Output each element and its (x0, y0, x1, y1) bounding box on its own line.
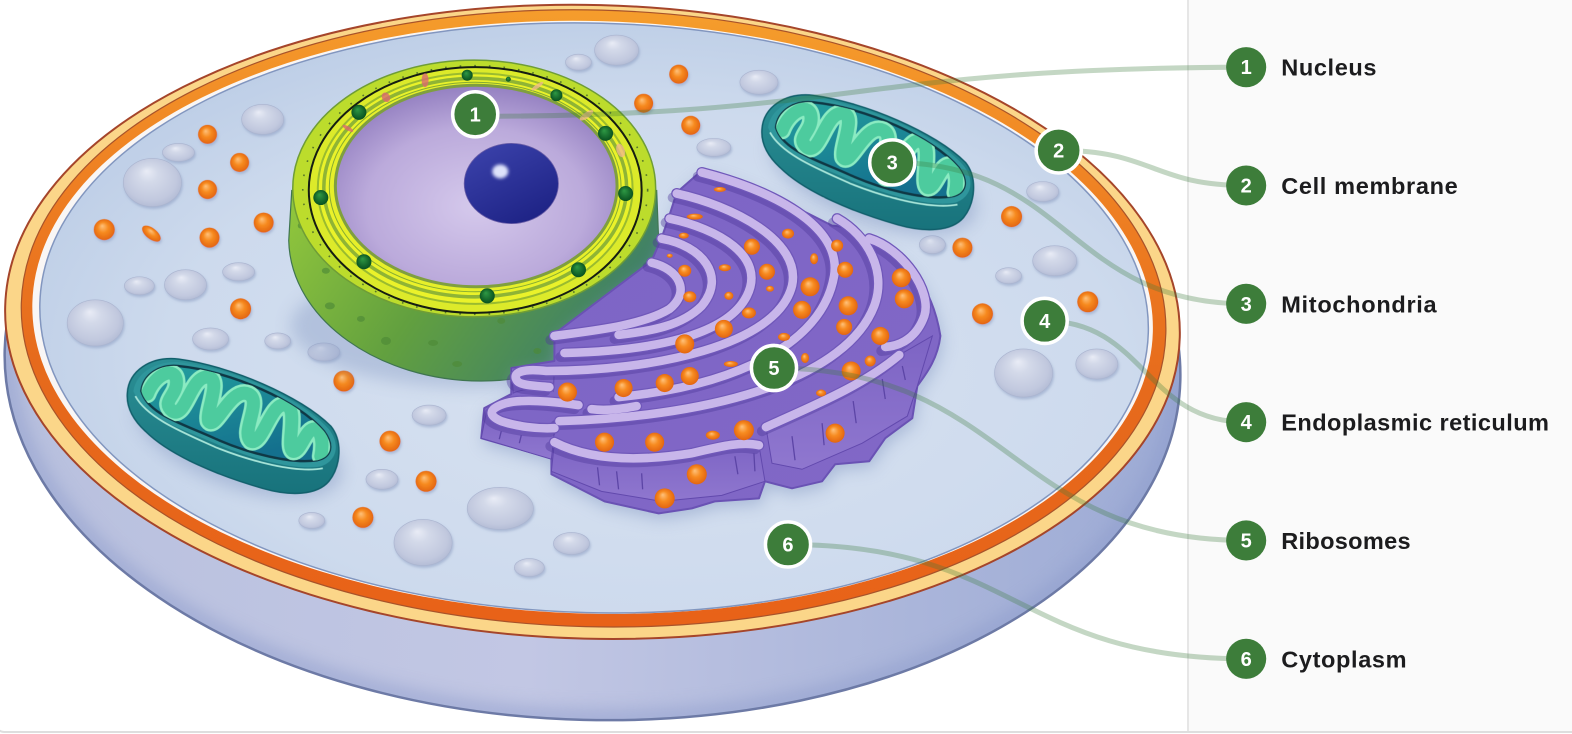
legend: Mitochondria (1226, 284, 1438, 324)
ribosomes on ER (558, 187, 914, 508)
illustration: animal cell (0, 0, 1190, 734)
marker 3: 3 (887, 152, 898, 174)
legend: Ribosomes: Ribosomes (1281, 528, 1411, 554)
organelle: mitochondrion lower left (121, 359, 356, 522)
marker 6 (765, 522, 811, 567)
ER front walls (481, 336, 932, 501)
legend: Cytoplasm (1226, 639, 1407, 679)
legend: Nucleus: 1 (1241, 57, 1252, 79)
marker 4: 4 (1039, 311, 1051, 333)
marker 5 (751, 345, 797, 391)
legend: Cytoplasm: Cytoplasm (1281, 646, 1407, 672)
legend: Cell membrane: 2 (1241, 176, 1252, 198)
marker 1: 1 (470, 104, 481, 126)
nucleolus (464, 143, 558, 224)
vesicles (67, 35, 1118, 577)
marker 5: 5 (768, 358, 780, 380)
ER folded membranes (488, 176, 922, 462)
marker 2 (1036, 128, 1081, 173)
legend panel background (1188, 0, 1572, 731)
legend: Mitochondria: 3 (1241, 294, 1252, 316)
cell base wall (3, 329, 1182, 722)
marker 1 (453, 92, 498, 137)
marker 3 (870, 140, 915, 185)
marker 4 (1022, 298, 1067, 343)
organelle: endoplasmic reticulum (481, 170, 942, 519)
organelle: nucleus (289, 60, 672, 388)
legend: Ribosomes: 5 (1241, 530, 1252, 552)
legend: Mitochondria: Mitochondria (1281, 291, 1438, 317)
legend: Cell membrane: Cell membrane (1281, 173, 1458, 199)
legend: Endoplasmic reticulum (1226, 402, 1549, 442)
legend: Cell membrane (1226, 165, 1458, 206)
legend: Cytoplasm: 6 (1241, 649, 1252, 671)
legend: Nucleus: Nucleus (1281, 55, 1377, 81)
legend: Nucleus (1226, 47, 1377, 87)
marker 6: 6 (782, 535, 794, 557)
cell membrane rings (0, 0, 1188, 654)
marker 2: 2 (1053, 140, 1064, 162)
free ribosomes in cytoplasm (94, 65, 1098, 528)
legend: Endoplasmic reticulum: 4 (1241, 412, 1253, 434)
legend: Ribosomes (1226, 520, 1411, 561)
organelle: mitochondrion upper right (756, 95, 991, 258)
nuclear pores (313, 70, 633, 303)
legend: Endoplasmic reticulum: Endoplasmic reticulum (1281, 410, 1549, 436)
connector lines (475, 67, 1246, 659)
